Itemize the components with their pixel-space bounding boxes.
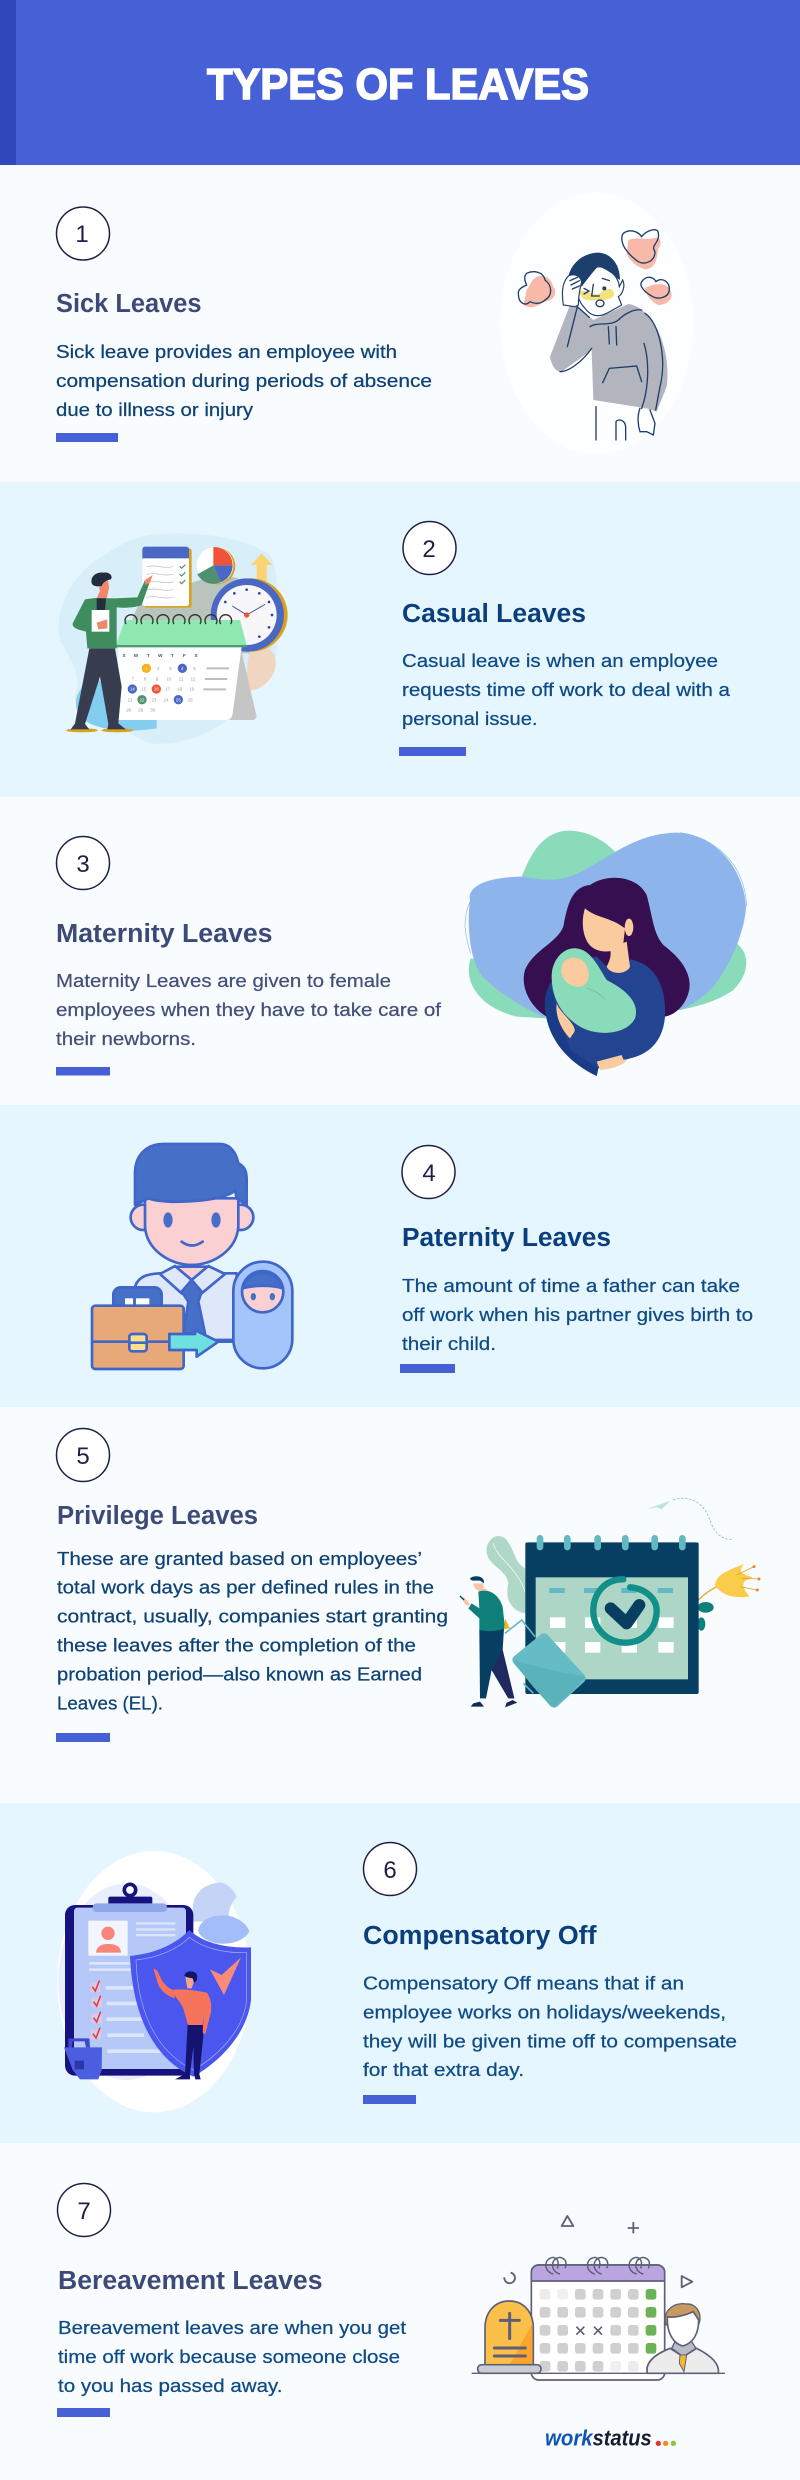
- illustration: man with calendar and clock: 3: [169, 666, 172, 671]
- illustration: traveller and calendar: [460, 1498, 760, 1707]
- text block: privilege leaves: [57, 1548, 448, 1714]
- number badge 4: [402, 1146, 455, 1198]
- illustration: calendar, gravestone and mourner: [472, 2216, 725, 2451]
- number badge 1: [56, 207, 110, 260]
- text block: compensatory off: for that extra day.: [363, 2059, 524, 2080]
- illustration: man with calendar and clock: 16: [154, 687, 159, 692]
- number badge 6: [364, 1842, 416, 1896]
- text block: bereavement leaves: time off work because someone close: [58, 2346, 400, 2367]
- header banner: [0, 0, 800, 165]
- text block: maternity leaves: [56, 970, 442, 1049]
- text block: bereavement leaves: to you has passed away.: [58, 2375, 282, 2396]
- text block: casual leaves: Casual leave is when an employee: [402, 650, 718, 671]
- number badge 3: 3: [76, 851, 90, 878]
- panel: bereavement leaves: [0, 2143, 800, 2480]
- illustration: mother and baby: [465, 831, 747, 1076]
- illustration: sick man: [500, 193, 693, 454]
- number badge 4: 4: [422, 1160, 436, 1187]
- text block: casual leaves: personal issue.: [402, 708, 538, 729]
- heading: maternity leaves: Maternity Leaves: [56, 920, 272, 948]
- illustration: man with calendar and clock: T: [147, 653, 150, 658]
- text block: compensatory off: [363, 1972, 737, 2080]
- illustration: father with briefcase and baby: [92, 1144, 292, 1369]
- text block: casual leaves: requests time off work to deal with a: [402, 679, 731, 700]
- title: TYPES OF LEAVES: [207, 60, 589, 109]
- heading: compensatory off: Compensatory Off: [363, 1922, 597, 1950]
- number badge 6: 6: [383, 1857, 397, 1884]
- accent bar: [399, 747, 466, 756]
- illustration: man with calendar and clock: 18: [177, 687, 183, 692]
- illustration: man with calendar and clock: 19: [189, 687, 195, 692]
- text block: paternity leaves: The amount of time a father can take: [402, 1275, 740, 1296]
- illustration: man with calendar and clock: 4: [181, 666, 184, 671]
- illustration: man with calendar and clock: [59, 533, 288, 744]
- heading: sick leaves: Sick Leaves: [56, 290, 202, 318]
- text block: privilege leaves: these leaves after the completion of the: [57, 1634, 416, 1656]
- text block: paternity leaves: [402, 1275, 753, 1354]
- text block: maternity leaves: their newborns.: [56, 1028, 196, 1049]
- text block: compensatory off: they will be given time off to compensate: [363, 2030, 737, 2052]
- panel: sick leaves: [0, 165, 800, 482]
- illustration: man with calendar and clock: 29: [138, 708, 144, 713]
- panel: casual leaves: [0, 482, 800, 797]
- accent bar: [56, 433, 118, 442]
- text block: bereavement leaves: [58, 2317, 406, 2396]
- panel: privilege leaves: [0, 1407, 800, 1803]
- number badge 2: [403, 522, 456, 574]
- number badge 7: [58, 2184, 110, 2236]
- illustration: man with calendar and clock: 11: [179, 677, 184, 682]
- number badge 7: 7: [77, 2198, 91, 2225]
- illustration: clipboard and shield: [57, 1851, 251, 2112]
- heading: paternity leaves: Paternity Leaves: [402, 1224, 611, 1252]
- text block: maternity leaves: Maternity Leaves are given to female: [56, 970, 391, 991]
- number badge 3: [56, 836, 110, 890]
- heading: privilege leaves: Privilege Leaves: [57, 1502, 258, 1530]
- accent bar: [56, 1733, 110, 1742]
- illustration: man with calendar and clock: 14: [130, 687, 135, 692]
- accent bar: [57, 2408, 110, 2417]
- number badge 5: 5: [76, 1443, 90, 1470]
- logo: workstatus: [545, 2426, 676, 2451]
- text block: compensatory off: Compensatory Off means that if an: [363, 1972, 684, 1994]
- illustration: man with calendar and clock: 12: [191, 677, 196, 682]
- text block: privilege leaves: total work days as per defined rules in the: [57, 1576, 434, 1598]
- illustration: man with calendar and clock: M: [134, 653, 138, 658]
- accent bar: [363, 2095, 416, 2104]
- text block: sick leaves: due to illness or injury: [56, 399, 254, 420]
- text block: paternity leaves: their child.: [402, 1333, 496, 1354]
- accent bar: [400, 1364, 455, 1373]
- text block: privilege leaves: These are granted based on employees’: [57, 1548, 422, 1569]
- number badge 1: 1: [75, 221, 89, 248]
- illustration: man with calendar and clock: 15: [141, 687, 147, 692]
- logo: workstatus: work: [545, 2426, 594, 2451]
- illustration: man with calendar and clock: 22: [140, 697, 145, 702]
- illustration: man with calendar and clock: 10: [167, 677, 172, 682]
- illustration: man with calendar and clock: 1: [145, 666, 148, 671]
- text block: maternity leaves: employees when they have to take care of: [56, 999, 442, 1020]
- text block: casual leaves: [402, 650, 731, 729]
- illustration: man with calendar and clock: F: [183, 653, 186, 658]
- illustration: man with calendar and clock: 26: [188, 697, 193, 702]
- illustration: man with calendar and clock: T: [171, 653, 174, 658]
- text block: privilege leaves: probation period—also known as Earned: [57, 1664, 422, 1684]
- text block: privilege leaves: contract, usually, companies start granting: [57, 1606, 448, 1626]
- logo: workstatus: status: [593, 2426, 652, 2451]
- illustration: man with calendar and clock: S: [194, 653, 198, 658]
- text block: bereavement leaves: Bereavement leaves are when you get: [58, 2317, 406, 2338]
- text block: sick leaves: [56, 341, 432, 420]
- illustration: man with calendar and clock: 23: [152, 697, 157, 702]
- illustration: man with calendar and clock: 5: [193, 666, 196, 671]
- text block: compensatory off: employee works on holidays/weekends,: [363, 2002, 726, 2022]
- illustration: man with calendar and clock: 2: [157, 666, 160, 671]
- text block: privilege leaves: Leaves (EL).: [57, 1692, 163, 1714]
- panel: paternity leaves: [0, 1105, 800, 1407]
- illustration: man with calendar and clock: 21: [128, 697, 133, 702]
- panel: maternity leaves: [0, 797, 800, 1105]
- panel: compensatory off: [0, 1803, 800, 2143]
- illustration: man with calendar and clock: 25: [176, 697, 181, 702]
- illustration: man with calendar and clock: 24: [164, 697, 169, 702]
- illustration: man with calendar and clock: W: [158, 653, 163, 658]
- illustration: man with calendar and clock: S: [122, 653, 126, 658]
- heading: casual leaves: Casual Leaves: [402, 600, 586, 628]
- text block: paternity leaves: off work when his partner gives birth to: [402, 1304, 753, 1325]
- illustration: man with calendar and clock: 8: [144, 677, 147, 682]
- illustration: man with calendar and clock: 28: [126, 708, 132, 713]
- text block: sick leaves: Sick leave provides an employee with: [56, 341, 397, 362]
- number badge 2: 2: [422, 536, 436, 563]
- illustration: man with calendar and clock: 17: [165, 687, 171, 692]
- illustration: man with calendar and clock: 7: [132, 677, 135, 682]
- illustration: man with calendar and clock: 30: [150, 708, 156, 713]
- illustration: man with calendar and clock: 9: [156, 677, 159, 682]
- accent bar: [56, 1067, 110, 1076]
- number badge 5: [56, 1428, 110, 1482]
- text block: sick leaves: compensation during periods of absence: [56, 370, 432, 391]
- heading: bereavement leaves: Bereavement Leaves: [58, 2267, 322, 2295]
